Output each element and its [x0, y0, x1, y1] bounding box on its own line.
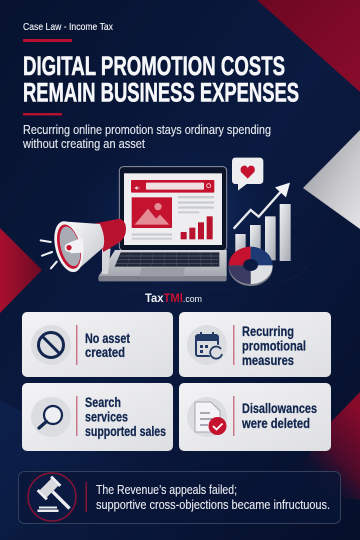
- growth bars: [235, 204, 291, 261]
- card text: Recurring: [242, 324, 294, 339]
- panel: outcome: [18, 472, 340, 524]
- icon: magnifying glass: [31, 397, 71, 437]
- subtitle: Recurring online promotion stays ordinary spending: [23, 123, 271, 137]
- megaphone: [41, 218, 126, 275]
- subtitle: without creating an asset: [22, 137, 145, 151]
- title rule: [23, 113, 62, 116]
- card text: [241, 401, 317, 431]
- logo: TaxTMI.com: [145, 293, 202, 305]
- card text: [85, 395, 166, 439]
- icon: prohibition sign: [31, 325, 71, 365]
- panel text: The Revenue’s appeals failed;: [96, 483, 237, 497]
- card: search services: [22, 383, 173, 451]
- title: [23, 51, 299, 108]
- icon: document with check: [187, 397, 227, 437]
- illustration: [41, 158, 305, 290]
- card text: supported sales: [85, 424, 166, 439]
- card text: Search: [85, 395, 121, 410]
- decorative red shape bottom right: [285, 392, 360, 500]
- eyebrow rule: [23, 39, 72, 42]
- decorative grey triangle right: [303, 130, 360, 229]
- panel text: [96, 483, 330, 512]
- icon: gavel: [28, 473, 77, 521]
- growth arrow: [234, 183, 290, 229]
- icon: calendar with refresh: [187, 325, 227, 365]
- card text: were deleted: [241, 416, 310, 431]
- laptop: [98, 167, 227, 281]
- card text: Disallowances: [242, 401, 317, 416]
- card: recurring promotional measures: [179, 312, 331, 377]
- card text: promotional: [242, 338, 306, 354]
- card text: [85, 331, 130, 360]
- card text: measures: [242, 353, 294, 368]
- card text: [242, 324, 306, 368]
- chat bubble heart: [232, 158, 263, 191]
- panel text: supportive cross-objections became infructuous.: [96, 498, 330, 512]
- donut chart: [229, 247, 273, 286]
- card text: created: [85, 345, 125, 360]
- card text: services: [85, 410, 128, 424]
- decorative red diamond left: [0, 228, 42, 313]
- card: no asset created: [22, 312, 173, 377]
- card text: No asset: [85, 331, 130, 346]
- eyebrow: Case Law - Income Tax: [23, 21, 114, 33]
- decorative red triangle top right: [257, 0, 360, 92]
- subtitle: [22, 123, 271, 151]
- card: disallowances deleted: [179, 383, 331, 451]
